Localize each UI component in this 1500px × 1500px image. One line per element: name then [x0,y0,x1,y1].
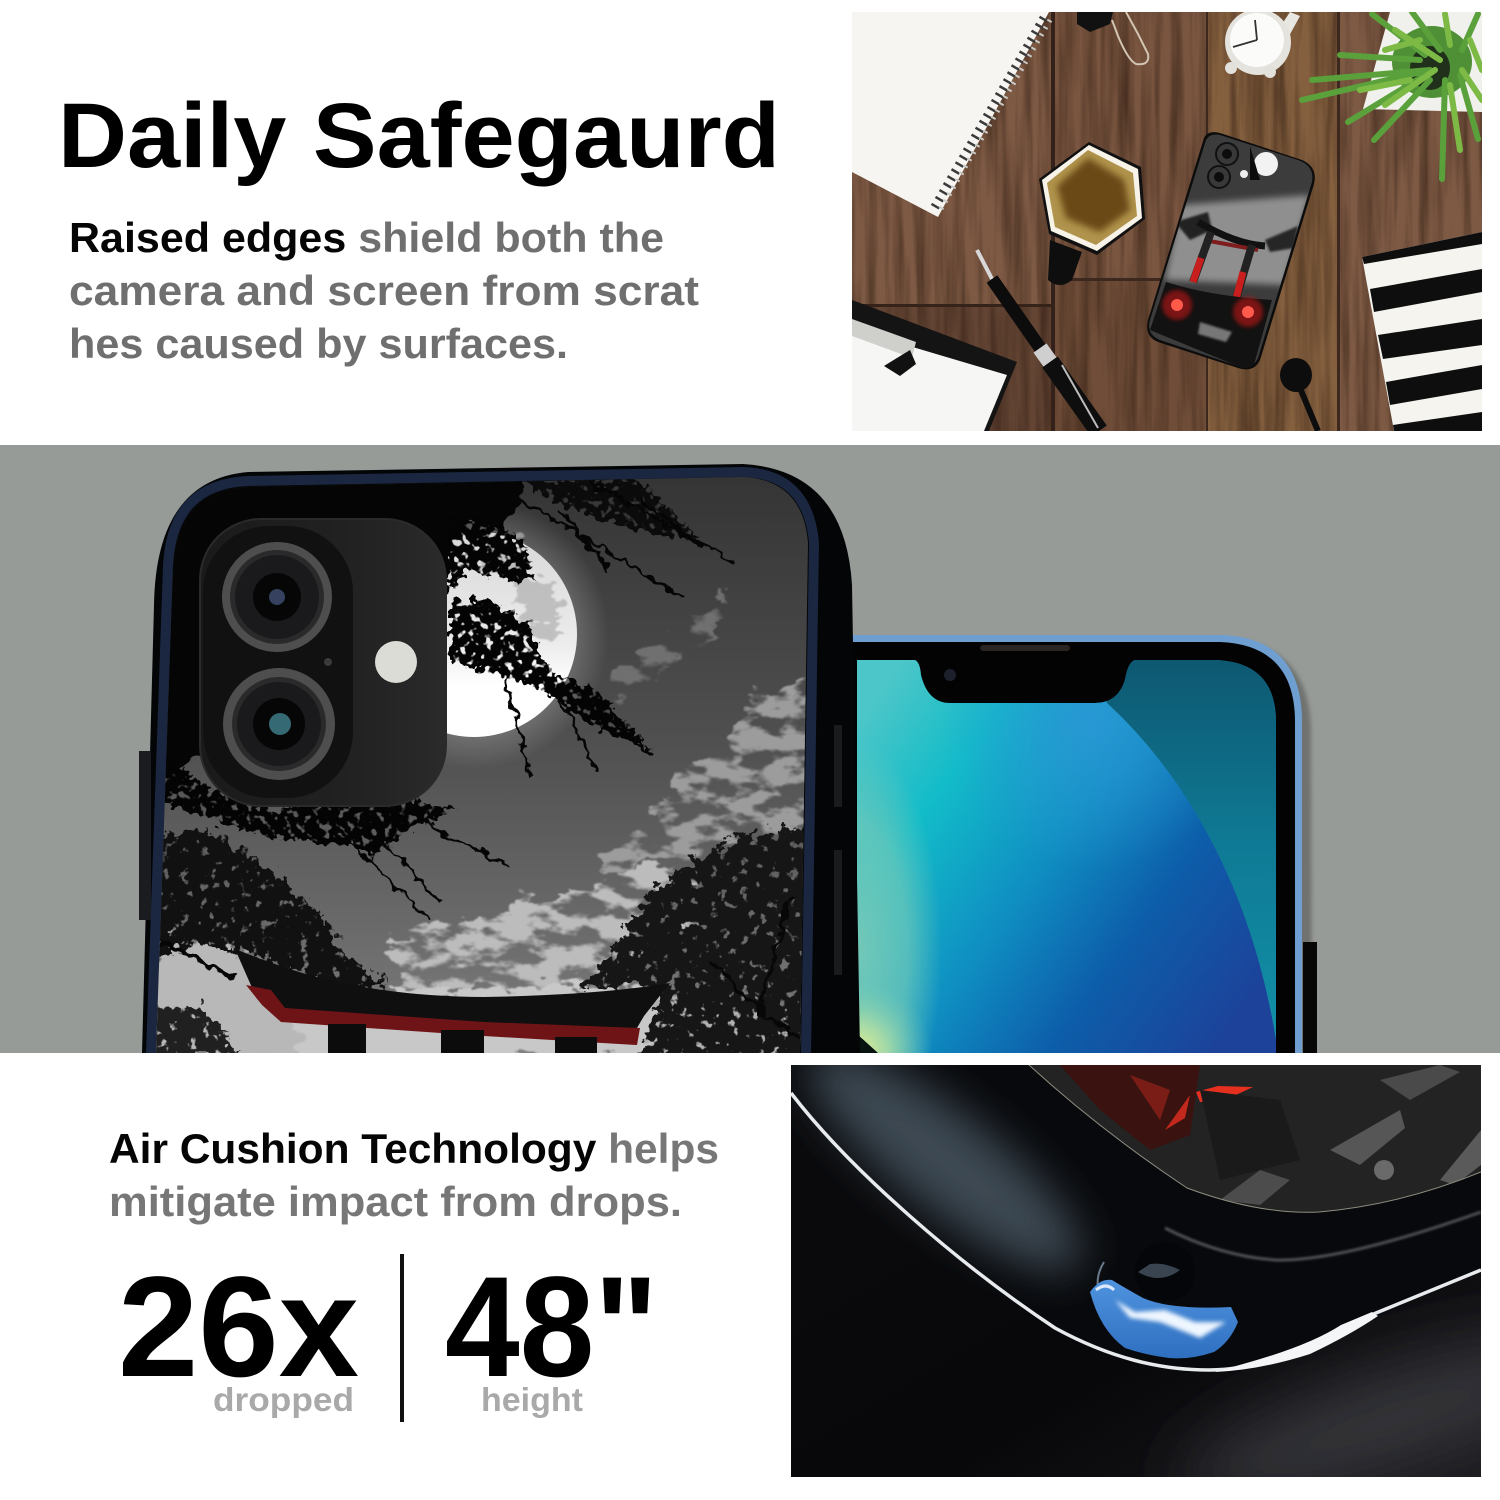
lens two [223,668,335,780]
stat: 26x dropped: dropped [213,1381,354,1418]
white edge highlight [791,1093,1481,1370]
print edge line [1029,1065,1481,1212]
text block: air cushion [109,1125,719,1225]
right side slots [834,725,842,975]
text block: air cushion: mitigate impact from drops. [109,1178,682,1225]
product phone [1140,130,1320,375]
notepad [852,12,1050,217]
clipboard [852,300,1017,431]
mini camera [1208,143,1248,188]
black knob spoon [1280,358,1318,431]
foliage: top mass [166,482,524,776]
inner ridge [1165,1212,1481,1260]
flash [375,641,417,683]
case print [1029,1065,1481,1215]
stat: 48 inches height: 48" [445,1248,658,1407]
case artwork [150,470,820,1060]
twigs [340,482,734,918]
binder clip [1077,12,1148,64]
lower clouds [150,930,800,1060]
coffee cup [1039,142,1145,285]
small tree bottom left [156,998,240,1053]
moon glow [446,514,601,760]
right tree trunk [710,900,800,1040]
water drop [1090,1242,1238,1358]
torii gate [235,949,670,1056]
pen [977,250,1099,431]
wood planks [852,12,1482,431]
clouds [394,590,815,990]
stat: 26x dropped: 26x [118,1248,359,1407]
moon [446,532,577,737]
lens one [222,542,332,652]
bumper glow [781,1018,1109,1302]
left tree trunk [160,940,235,978]
stat divider [400,1254,404,1422]
case bumper [791,1065,1481,1370]
earpiece [980,645,1070,651]
back phone: case [139,464,860,1060]
left tree [150,832,388,992]
selfie camera [944,669,956,681]
microphone dot [324,658,332,666]
front phone: blue iPhone [852,635,1317,1053]
text block: raised edges: hes caused by surfaces. [69,320,568,367]
striped notebook [1362,232,1482,431]
blue rim [151,472,814,1053]
alarm clock [1225,9,1300,78]
text block: raised edges [69,214,699,367]
side button [139,751,151,920]
text block: air cushion: Air Cushion Technology helps [109,1125,719,1172]
camera island [199,518,447,807]
moon craters [480,540,560,640]
mini case artwork [1149,134,1312,368]
floor sheen [1165,1304,1500,1500]
corner of bezel [860,1036,878,1053]
text block: raised edges: Raised edges shield both the [69,214,664,261]
foliage: branches over the moon [160,478,700,856]
stat: 48 inches height: height [481,1381,583,1418]
title: Daily Safegaurd [58,85,780,187]
macro photo: raised edge with water drop [781,1018,1500,1500]
power button [1303,942,1317,1053]
right tree [578,828,810,1060]
middle band [0,445,1500,1053]
plant in white pot [1302,12,1482,179]
wallpaper [857,660,1276,1053]
text block: raised edges: camera and screen from scrat [69,267,699,314]
edge highlight thick part [1215,1312,1378,1372]
photo: phone on wooden desk [852,9,1482,431]
